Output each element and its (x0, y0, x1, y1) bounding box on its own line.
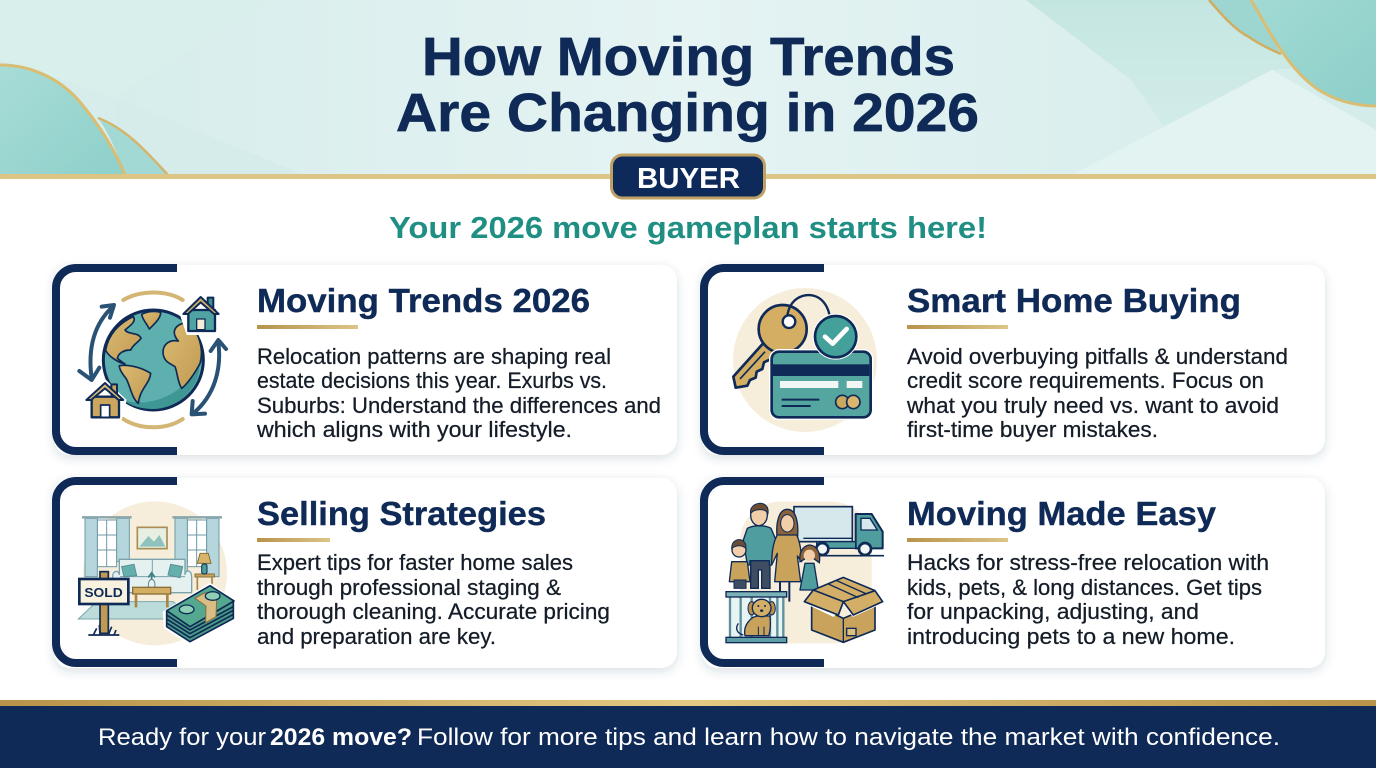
icon: staged room with sold sign and money (78, 501, 237, 645)
body text: kids, pets, & long distances. Get tips (907, 575, 1262, 600)
footer band: 2026 move? (270, 724, 412, 751)
body text: thorough cleaning. Accurate pricing (257, 599, 610, 624)
body text: which aligns with your lifestyle. (256, 417, 572, 442)
title: How Moving Trends (422, 27, 955, 87)
body text (907, 550, 1269, 649)
body text: Avoid overbuying pitfalls & understand (907, 344, 1288, 369)
heading: Moving Made Easy (907, 495, 1217, 532)
heading underline (257, 325, 358, 329)
footer band: Ready for your (98, 724, 266, 751)
heading: Selling Strategies (257, 495, 546, 532)
body text: what you truly need vs. want to avoid (906, 393, 1279, 418)
body text: Expert tips for faster home sales (257, 550, 573, 575)
title: Are Changing in 2026 (396, 83, 979, 143)
body text (257, 550, 610, 649)
heading underline (907, 538, 1008, 542)
body text (256, 344, 661, 442)
heading: Smart Home Buying (907, 282, 1241, 319)
body text: Hacks for stress-free relocation with (907, 550, 1269, 575)
panel: selling strategies (54, 478, 677, 668)
icon: staged room with sold sign and money: SOLD (84, 585, 123, 600)
body text: introducing pets to a new home. (907, 624, 1235, 649)
header gold rule (0, 174, 1376, 179)
panel: moving made easy (702, 478, 1325, 668)
body text: through professional staging & (257, 575, 561, 600)
panel: smart home buying (702, 265, 1325, 455)
body text (906, 344, 1288, 442)
title (396, 27, 979, 143)
badge: buyer: BUYER (637, 163, 740, 195)
footer band (0, 706, 1376, 768)
heading: Moving Trends 2026 (257, 282, 590, 319)
footer gold rule (0, 700, 1376, 706)
icon: globe with houses and arrows (79, 292, 226, 427)
badge: buyer (612, 155, 764, 198)
body text: estate decisions this year. Exurbs vs. (257, 368, 607, 393)
subtitle: Your 2026 move gameplan starts here! (389, 210, 987, 245)
body text: Suburbs: Understand the differences and (257, 393, 661, 418)
heading underline (257, 538, 330, 542)
icon: key and credit card (733, 288, 877, 432)
panel: moving trends (54, 265, 677, 455)
heading underline (907, 325, 1008, 329)
footer band: Follow for more tips and learn how to navigate the market with confidence. (417, 724, 1280, 751)
body text: credit score requirements. Focus on (907, 368, 1264, 393)
body text: for unpacking, adjusting, and (907, 599, 1199, 624)
body text: Relocation patterns are shaping real (257, 344, 611, 369)
header background (0, 0, 1376, 176)
body text: first-time buyer mistakes. (907, 417, 1158, 442)
icon: family, truck, pet crate and box (726, 502, 884, 643)
body text: and preparation are key. (257, 624, 496, 649)
